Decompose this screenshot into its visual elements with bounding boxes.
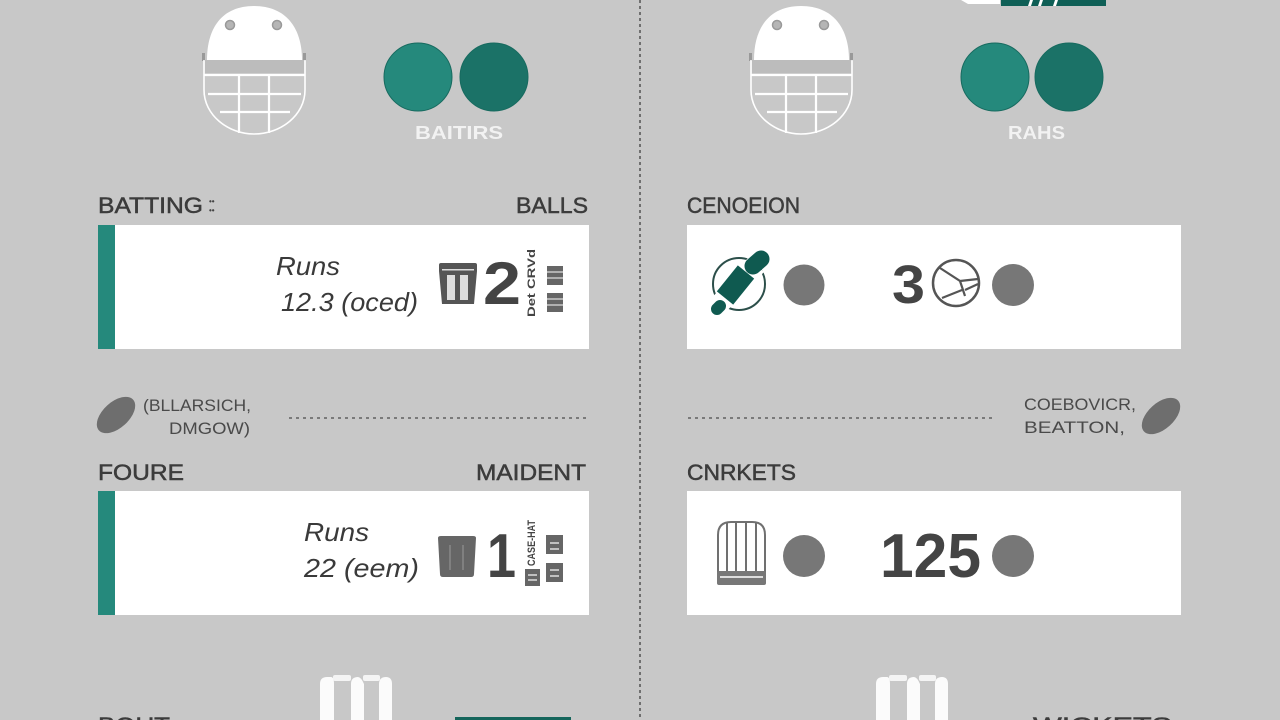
- panel: fours runs card: [98, 491, 589, 615]
- heading: cenoeion: CENOEION: [687, 193, 800, 218]
- big number: 125: [880, 522, 981, 591]
- panel: crickets card: [687, 491, 1181, 615]
- icon: left stumps: [320, 675, 392, 720]
- small vertical text: CASE-HAT: [526, 520, 538, 566]
- bottom left bar: [455, 717, 571, 720]
- icon: cage: [717, 522, 766, 585]
- heading: foure: FOURE: [98, 460, 184, 485]
- heading: batting: BATTING: [98, 193, 203, 218]
- accent bar: [98, 225, 115, 349]
- grey dot: [784, 264, 824, 306]
- runs text: Runs: [276, 251, 340, 281]
- heading: batting: ••: [209, 206, 215, 215]
- heading: maiden: MAIDENT: [476, 460, 586, 485]
- left ball caption: DMGOW): [169, 419, 250, 438]
- icon: bat in circle: [708, 258, 765, 316]
- icon: right oval ball: [1135, 391, 1187, 441]
- left ball caption: (BLLARSICH,: [143, 396, 251, 415]
- icon: bin: [439, 263, 477, 304]
- icon: right batting helmet: [749, 6, 853, 134]
- panel: batting runs card: [98, 225, 589, 349]
- runs value text: 22 (eem): [303, 553, 419, 583]
- left ball caption: [143, 396, 251, 438]
- right circles label: RAHS: [1008, 123, 1065, 143]
- left dotted divider: [289, 417, 590, 419]
- icon: small tables: [525, 535, 563, 586]
- icon: right teal circles: [961, 43, 1103, 111]
- big number: 3: [892, 255, 925, 315]
- heading: crickets: CNRKETS: [687, 460, 796, 485]
- icon: left teal circles: [384, 43, 528, 111]
- panel: cenoeion card: [687, 225, 1181, 349]
- right ball caption: BEATTON,: [1024, 418, 1125, 437]
- grey dot: [783, 535, 825, 577]
- runs value text: 12.3 (oced): [281, 287, 418, 317]
- grey dot: [992, 535, 1034, 577]
- small vertical text: Det CRVd: [526, 249, 538, 317]
- center dashed divider: [639, 0, 641, 720]
- icon: right stumps: [876, 675, 948, 720]
- right ball caption: [1024, 395, 1136, 437]
- accent bar: [98, 491, 115, 615]
- right ball caption: COEBOVICR,: [1024, 395, 1136, 414]
- grey dot: [992, 264, 1034, 306]
- left circles label: BAITIRS: [415, 123, 503, 143]
- heading: balls: BALLS: [516, 193, 588, 218]
- icon: left batting helmet: [202, 6, 306, 134]
- big number: 1: [487, 522, 516, 591]
- runs text: Runs: [304, 517, 369, 547]
- icon: left oval ball: [90, 390, 142, 440]
- icon: small tables: [547, 266, 563, 312]
- big number: 2: [483, 250, 521, 317]
- icon: circled symbol: [933, 260, 979, 306]
- heading: batting: ••: [209, 197, 215, 206]
- right dotted divider: [688, 417, 996, 419]
- icon: top right bat fragment: [961, 0, 1106, 6]
- icon: bucket: [438, 536, 476, 577]
